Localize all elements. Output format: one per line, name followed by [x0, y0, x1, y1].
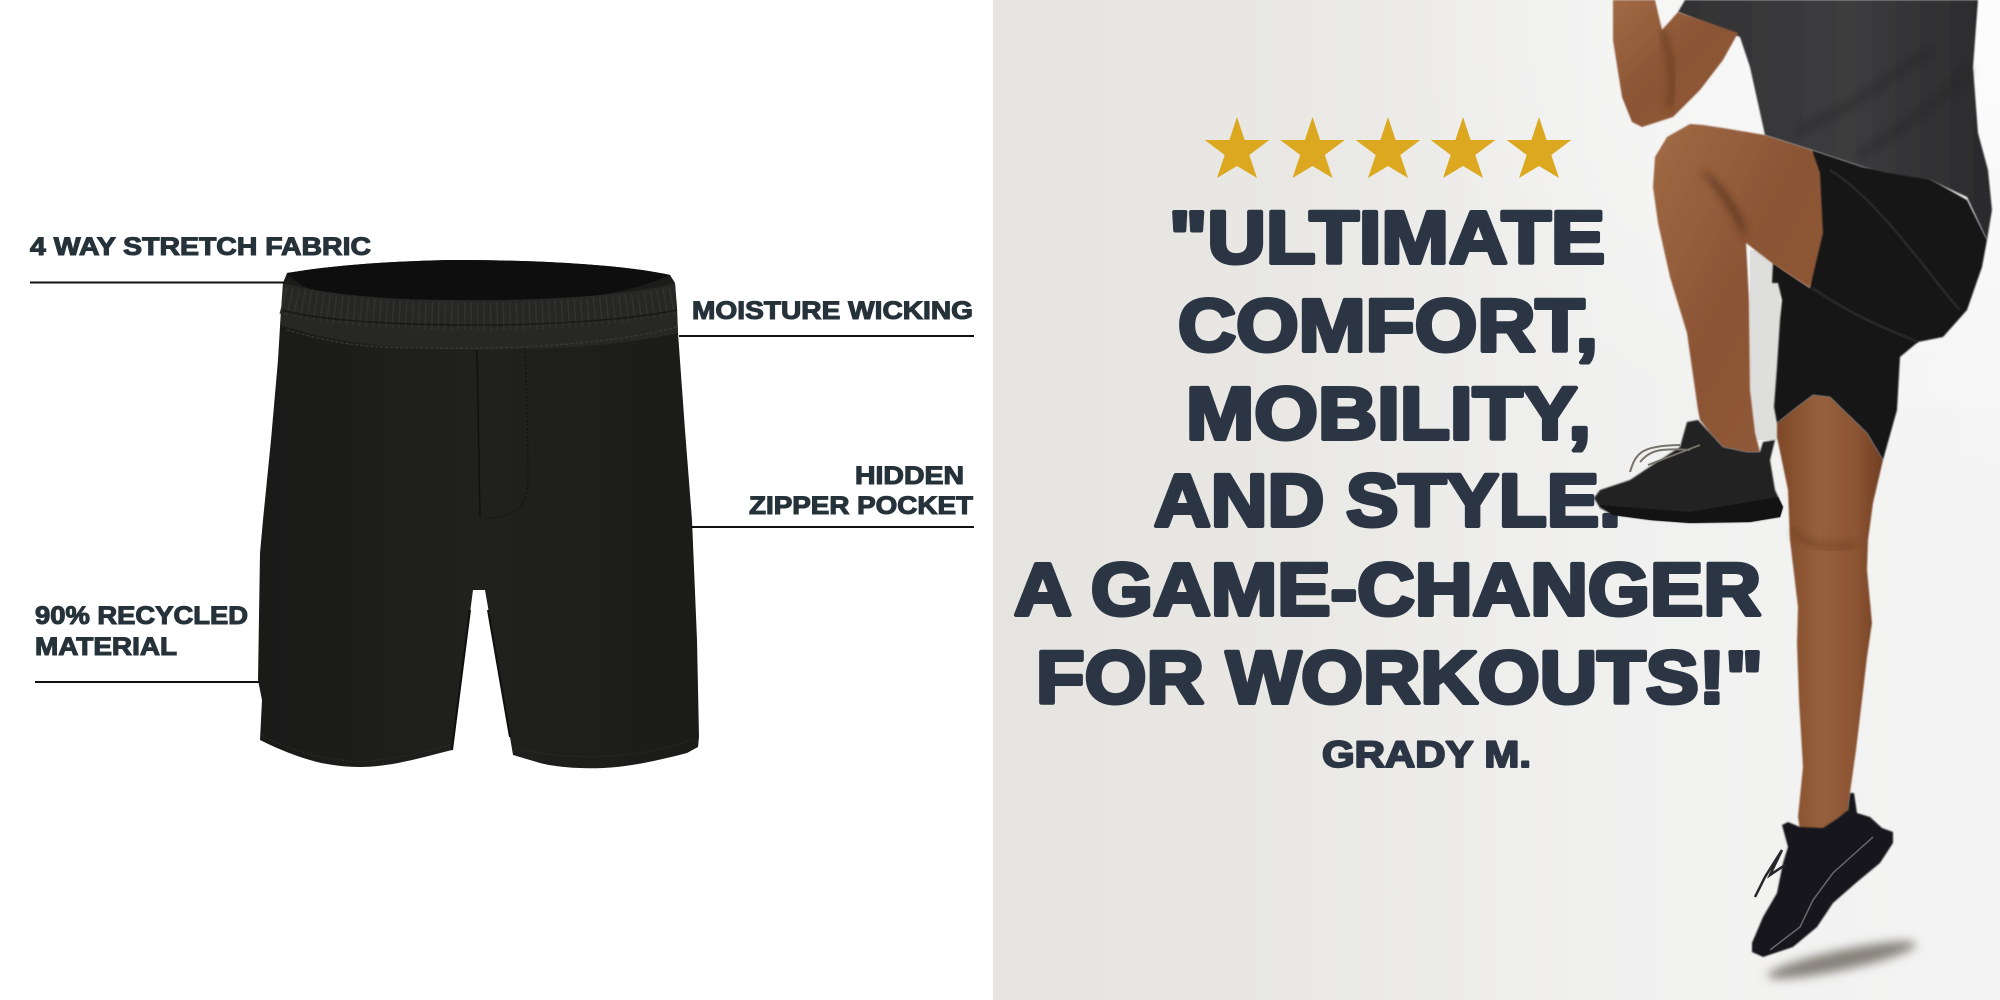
arm [1613, 0, 1738, 127]
raised leg shading [1700, 170, 1745, 240]
shirt folds [1800, 50, 1970, 155]
review quote: COMFORT, [1178, 284, 1598, 367]
athlete photo [1594, 0, 1992, 986]
standing leg [1777, 395, 1883, 830]
bottom shoe sole line [1770, 837, 1873, 950]
review quote: A GAME-CHANGER [1014, 548, 1761, 631]
review quote [1014, 196, 1763, 719]
callout: 4 way stretch fabric: 4 WAY STRETCH FABRIC [30, 233, 371, 261]
review quote: MOBILITY, [1186, 372, 1591, 455]
callout: hidden zipper pocket [691, 462, 974, 528]
review quote: AND STYLE. [1154, 459, 1621, 542]
icon: five gold stars [1205, 117, 1571, 178]
callout: 90% recycled material [35, 602, 260, 683]
product photo: black shorts [258, 260, 699, 768]
callout: hidden zipper pocket: HIDDEN [855, 462, 964, 490]
arm crease [1662, 30, 1672, 108]
callout: 90% recycled material: MATERIAL [35, 633, 177, 661]
review author: GRADY M. [1322, 734, 1531, 775]
shirt [1678, 0, 1992, 240]
shorts [1772, 150, 1987, 460]
raised shoe [1594, 420, 1783, 523]
callout: hidden zipper pocket: ZIPPER POCKET [749, 492, 973, 520]
panel: product features [0, 0, 993, 1000]
callout: 90% recycled material: 90% RECYCLED [35, 602, 248, 630]
leg knee crease [1793, 530, 1855, 546]
review quote: "ULTIMATE [1169, 196, 1605, 279]
review quote: FOR WORKOUTS!" [1036, 636, 1763, 719]
raised shoe sole [1600, 497, 1783, 523]
raised shoe laces [1630, 445, 1700, 472]
bottom shoe [1752, 793, 1893, 957]
bottom shoe laces [1755, 850, 1785, 897]
panel: testimonial background [993, 0, 2000, 1000]
shorts fold [1812, 170, 1960, 342]
callout: moisture wicking: MOISTURE WICKING [692, 297, 973, 325]
raised leg [1653, 124, 1823, 452]
shadow under foot [1766, 934, 1918, 986]
